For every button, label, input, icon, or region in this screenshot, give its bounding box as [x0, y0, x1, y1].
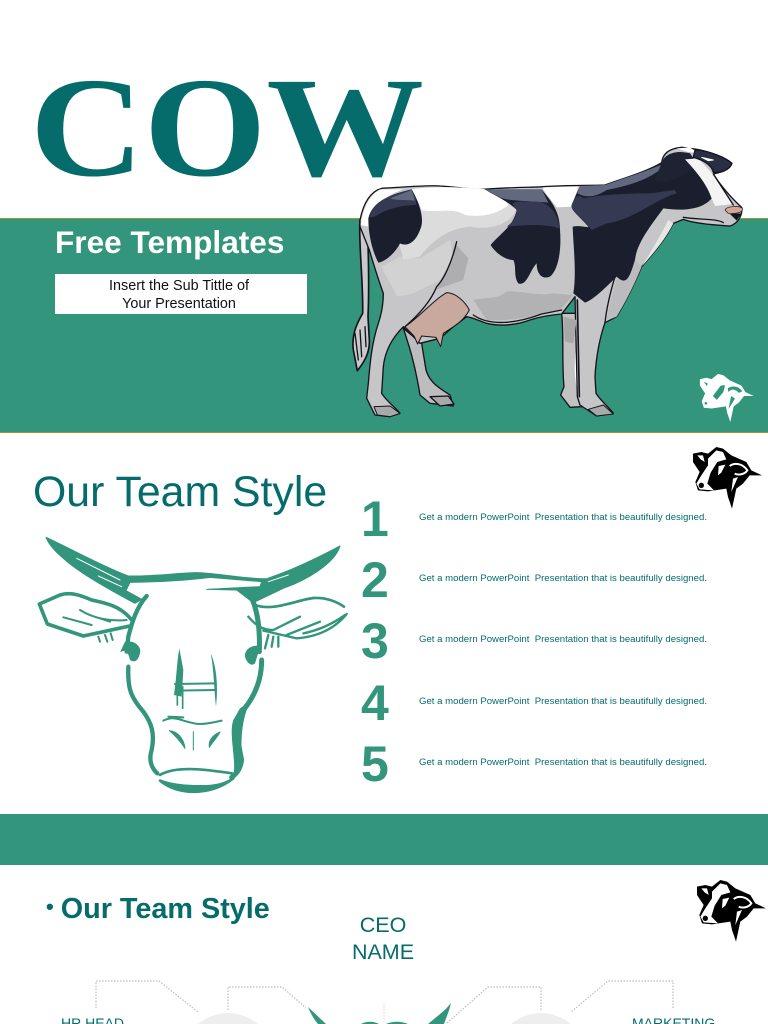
- numbered list: 1: [361, 491, 389, 547]
- hooves: [374, 406, 400, 417]
- CEO name: NAME: [352, 940, 414, 964]
- numbered list: Get a modern PowerPoint Presentation that is beautifully designed.: [419, 512, 707, 523]
- numbered list: 4: [361, 675, 389, 731]
- CEO name: [352, 913, 414, 964]
- belly and thigh lines: [405, 242, 562, 327]
- black mid patch: [485, 189, 560, 284]
- numbered list: [361, 491, 707, 792]
- muzzle: [725, 207, 743, 213]
- numbered list: 5: [361, 736, 389, 792]
- ear: [693, 150, 732, 173]
- numbered list: 3: [361, 613, 389, 669]
- white back patches: [399, 187, 517, 259]
- ears: [39, 594, 132, 636]
- small bull head: [308, 1003, 451, 1024]
- far front leg: [561, 313, 585, 407]
- udder: [405, 293, 469, 347]
- horns and brow: [46, 537, 340, 603]
- illustration: holstein cow: [353, 147, 743, 417]
- nose and nostrils: [163, 717, 222, 724]
- face white: [685, 158, 733, 206]
- team member circles: [198, 1013, 571, 1024]
- org chart connectors: [96, 981, 673, 1023]
- subtitle box: Your Presentation: [122, 296, 236, 312]
- black rump patch: [368, 189, 422, 263]
- subtitle box: Insert the Sub Tittle of: [109, 278, 249, 294]
- numbered list: Get a modern PowerPoint Presentation that is beautifully designed.: [419, 573, 707, 584]
- body shading: [435, 243, 468, 290]
- icon: white cow head on band: [700, 374, 754, 422]
- forehead marks: [174, 648, 183, 697]
- numbered list: Get a modern PowerPoint Presentation that is beautifully designed.: [419, 757, 707, 768]
- chest shading: [642, 220, 673, 267]
- tail: [353, 220, 369, 371]
- icon: black cow head top: [693, 447, 762, 509]
- green divider band: [0, 814, 768, 865]
- mouth and chin: [160, 769, 232, 775]
- far hind leg: [403, 328, 453, 406]
- black front patch: [571, 152, 712, 303]
- cover heading: Free Templates: [55, 224, 284, 260]
- face outline: [127, 596, 157, 773]
- illustration: bull head: [39, 537, 347, 792]
- cheek shading: [232, 702, 250, 777]
- body: [360, 147, 742, 417]
- icon: black cow head lower: [697, 880, 766, 942]
- CEO name: CEO: [360, 913, 406, 937]
- bullet heading: our team style: •Our Team Style: [46, 893, 270, 925]
- numbered list: 2: [361, 552, 389, 608]
- numbered list: Get a modern PowerPoint Presentation that is beautifully designed.: [419, 696, 707, 707]
- numbered list: Get a modern PowerPoint Presentation that is beautifully designed.: [419, 634, 707, 645]
- green cover band: [0, 218, 768, 433]
- subtitle box: [55, 274, 307, 314]
- section heading: our team style: Our Team Style: [33, 468, 327, 516]
- eyes: [120, 641, 140, 661]
- title: COW: [30, 48, 424, 206]
